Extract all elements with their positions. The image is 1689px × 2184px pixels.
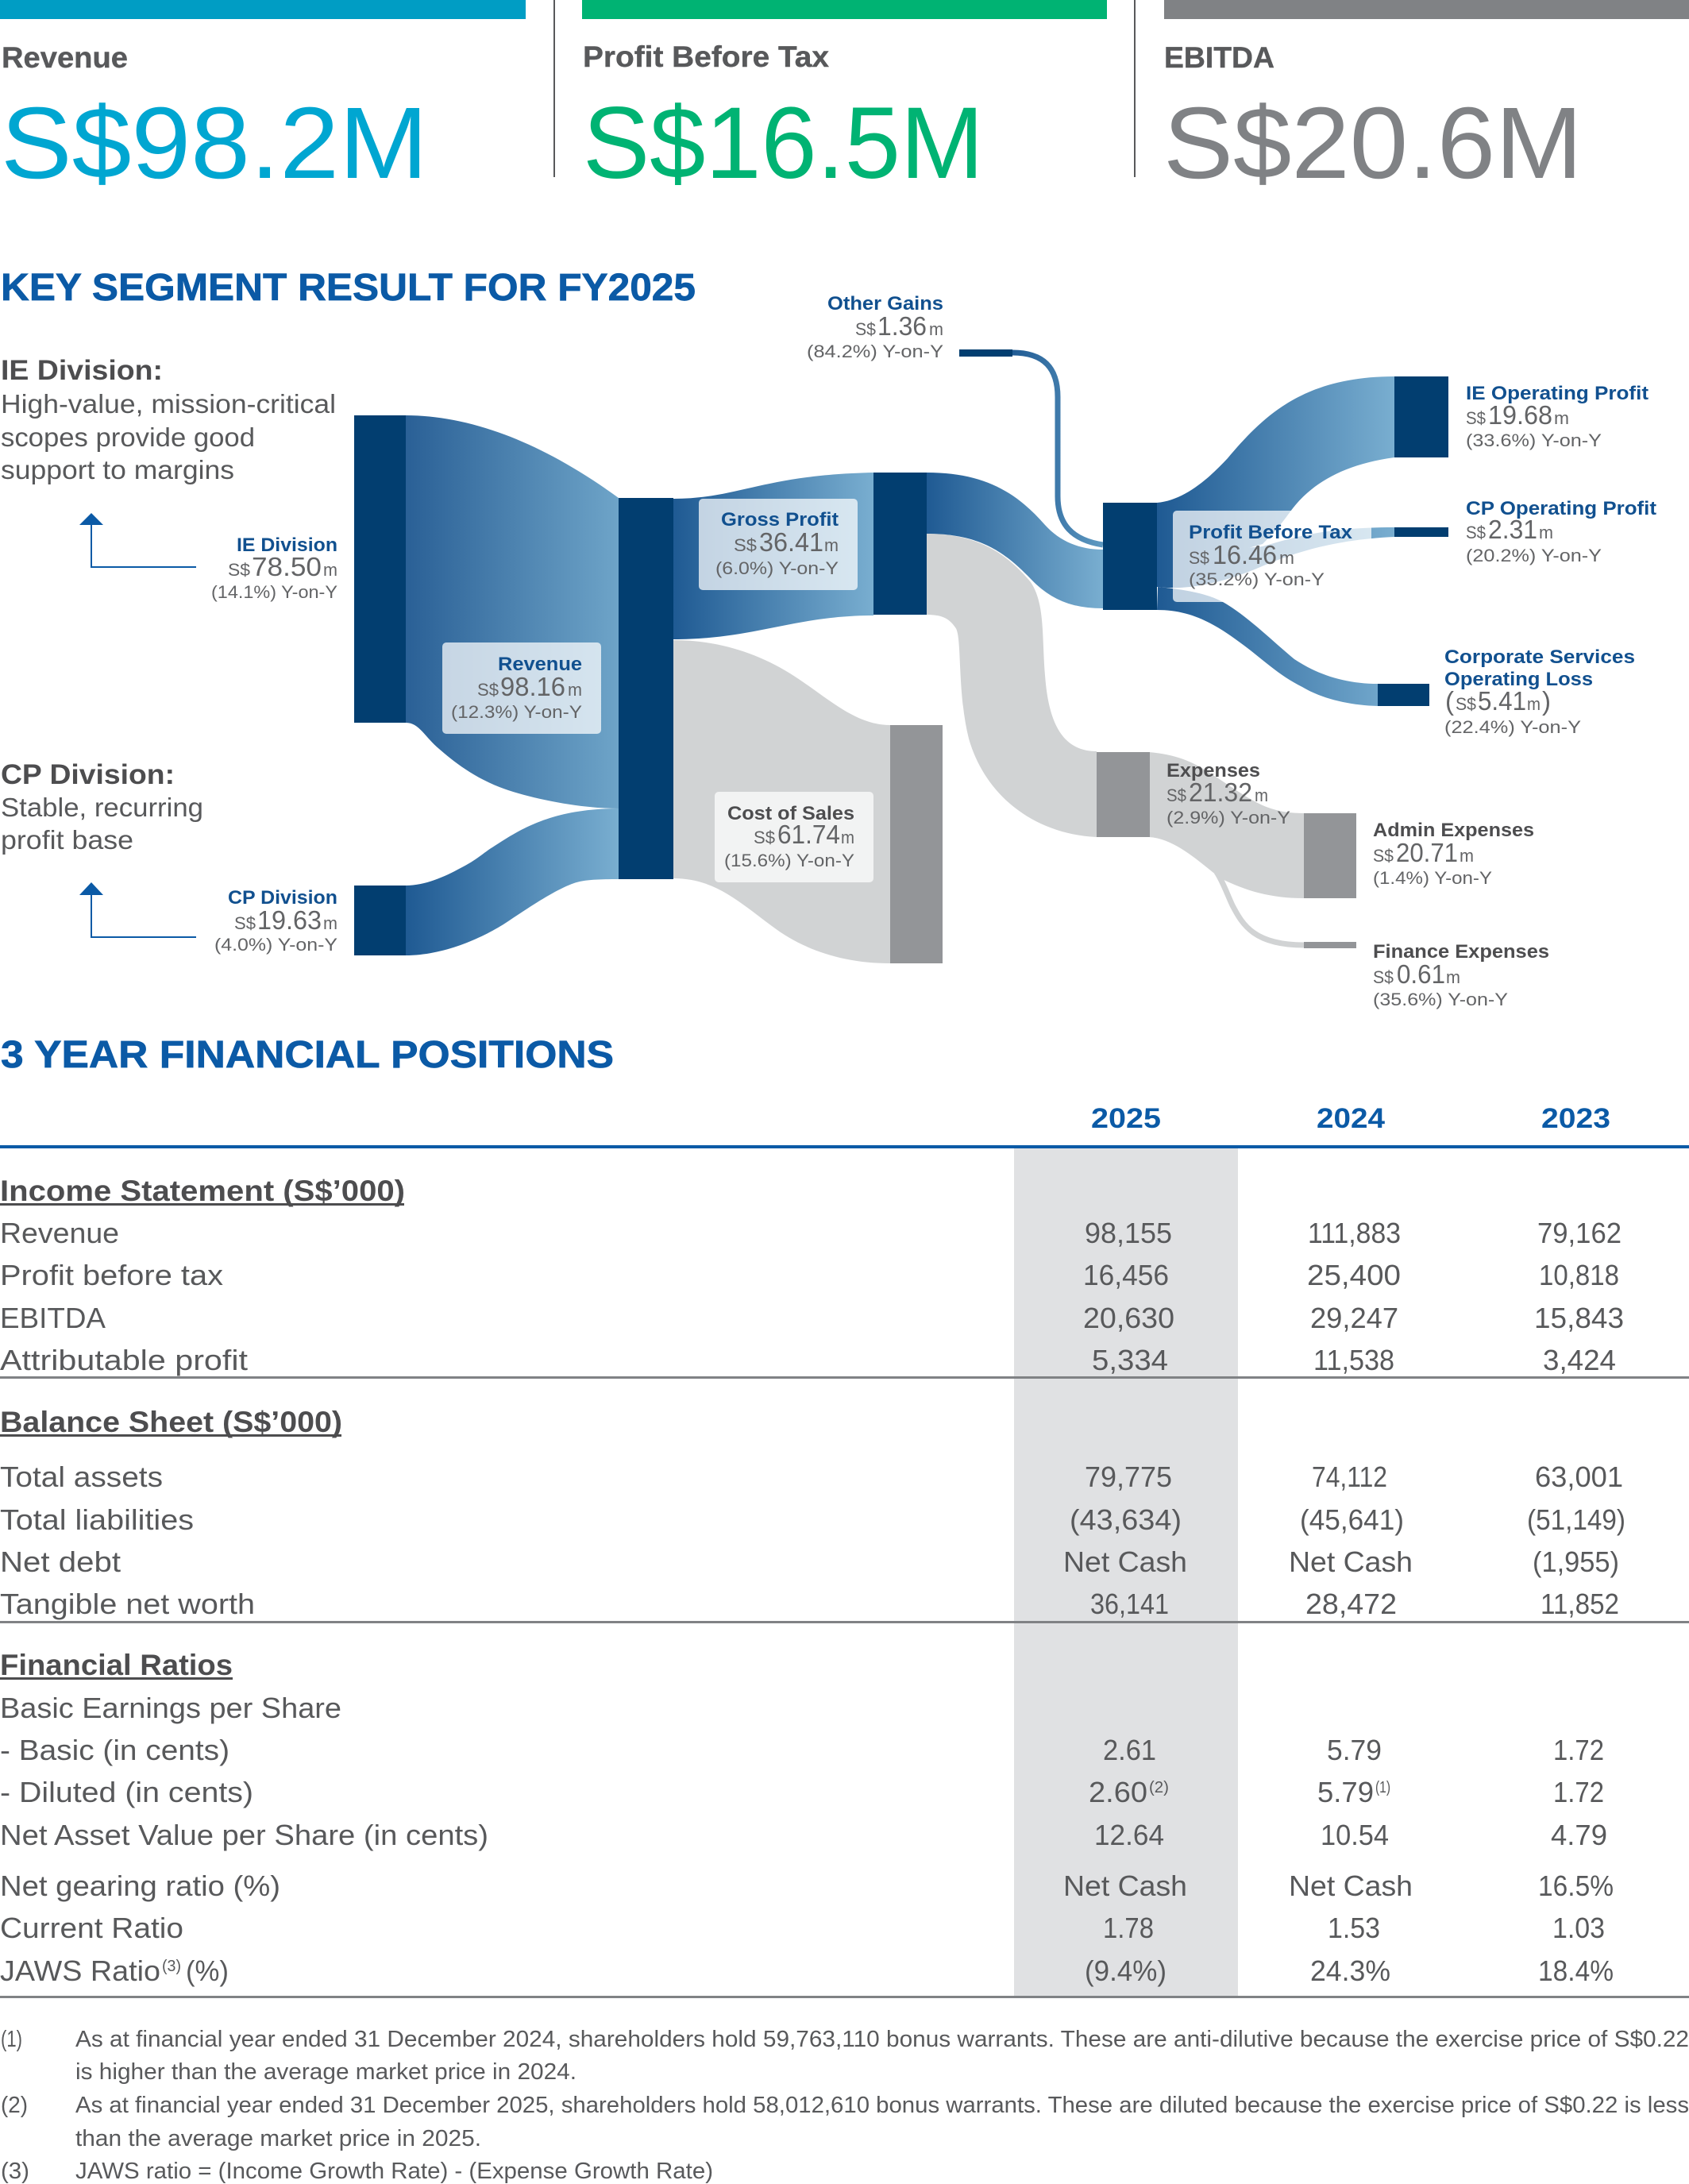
label: Profit Before Tax: 16.46	[1213, 540, 1277, 569]
flow: Revenue to Cost of Sales	[673, 640, 890, 963]
label: CP Operating Profit	[1466, 498, 1656, 565]
row: JAWS ratio: (3)	[162, 1958, 181, 1975]
text block: IE Division commentary: High-value, mission-critical	[1, 389, 336, 419]
label: CP Operating Profit: m	[1539, 523, 1553, 542]
text block: CP Division commentary: Stable, recurring	[1, 793, 203, 822]
row: total liabilities: (43,634)	[1070, 1503, 1182, 1536]
footnote 3: JAWS ratio = (Income Growth Rate) - (Expense Growth Rate)	[75, 2159, 713, 2184]
footnote 2: (2)	[1, 2093, 28, 2118]
row: attributable profit: 3,424	[1543, 1344, 1616, 1376]
row: net gearing ratio: Net Cash	[1289, 1870, 1413, 1902]
row: basic in cents: 2.61	[1103, 1734, 1156, 1766]
row: net debt: Net Cash	[1063, 1545, 1187, 1578]
row: basic in cents	[0, 1734, 1604, 1766]
footnote 1	[1, 2027, 1689, 2085]
label box: Revenue	[442, 642, 601, 734]
row: EBITDA: 15,843	[1534, 1302, 1624, 1334]
label: IE Operating Profit: m	[1554, 408, 1569, 428]
node: Corporate Services	[1378, 684, 1429, 706]
label: CP Division: 19.63	[257, 905, 322, 935]
table section: balance sheet	[0, 1406, 1625, 1620]
label: IE Operating Profit	[1466, 383, 1649, 450]
heading: financial ratios: Financial Ratios	[0, 1649, 233, 1681]
row: net debt: Net Cash	[1289, 1545, 1413, 1578]
row: tangible net worth	[0, 1588, 1619, 1620]
row: net gearing ratio: Net gearing ratio (%)	[0, 1870, 280, 1902]
label: CP Operating Profit: S$	[1466, 523, 1486, 542]
table section: income statement	[0, 1175, 1624, 1376]
node: IE Operating Profit	[1394, 376, 1448, 457]
row: revenue: Revenue	[0, 1217, 119, 1249]
label: Profit Before Tax: Profit Before Tax	[1189, 522, 1353, 543]
label: Revenue: (12.3%) Y-on-Y	[451, 702, 582, 722]
label: Gross Profit: Gross Profit	[721, 509, 839, 531]
node: Admin Expenses	[1304, 813, 1356, 898]
footnote 1: As at financial year ended 31 December 2024, shareholders hold 59,763,110 bonus warrants. These are anti-dilutive because the exercise price of S$0.22	[75, 2027, 1689, 2052]
label: Finance Expenses: 0.61	[1397, 959, 1445, 989]
label: IE Division: (14.1%) Y-on-Y	[211, 582, 337, 602]
label: CP Operating Profit: 2.31	[1488, 515, 1537, 544]
row: JAWS ratio: (%)	[186, 1954, 229, 1987]
label: Revenue: 98.16	[500, 672, 565, 701]
label: Corporate Services Operating Loss: (22.4%) Y-on-Y	[1444, 717, 1581, 737]
text block: CP Division commentary	[1, 759, 203, 855]
table header: years: 2023	[1541, 1103, 1610, 1134]
label: Admin Expenses: S$	[1373, 846, 1394, 866]
row: total assets: 63,001	[1535, 1461, 1623, 1493]
node: Expenses	[1097, 752, 1150, 837]
row: total assets: Total assets	[0, 1461, 163, 1493]
node: Other Gains	[959, 349, 1012, 357]
flow: Revenue to Gross Profit	[673, 473, 873, 639]
heading: income statement: Income Statement (S$’000)	[0, 1175, 405, 1207]
row: current ratio: 1.78	[1103, 1912, 1154, 1944]
row: current ratio: 1.03	[1552, 1912, 1605, 1944]
label: Finance Expenses	[1373, 941, 1549, 1009]
flow: Profit Before Tax to CP Operating Profit	[1157, 527, 1394, 588]
heading: balance sheet: Balance Sheet (S$’000)	[0, 1406, 342, 1438]
label: Admin Expenses: m	[1460, 846, 1474, 866]
label: Cost of Sales: 61.74	[777, 820, 840, 849]
row: net gearing ratio: 16.5%	[1538, 1870, 1614, 1902]
row: current ratio: Current Ratio	[0, 1912, 183, 1944]
row: net gearing ratio	[0, 1870, 1614, 1902]
footnote 3: (3)	[1, 2159, 29, 2184]
row: EBITDA: EBITDA	[0, 1302, 106, 1334]
row: attributable profit: 5,334	[1092, 1344, 1168, 1376]
flow: Profit Before Tax to IE Operating Profit	[1157, 376, 1394, 573]
row: attributable profit	[0, 1344, 1616, 1376]
flow: Gross Profit to Expenses	[927, 534, 1097, 837]
flow: Expenses to Admin Expenses	[1149, 752, 1304, 898]
row: total liabilities: Total liabilities	[0, 1503, 194, 1536]
heading: key segment result: KEY SEGMENT RESULT FOR FY2025	[1, 267, 696, 309]
row: attributable profit: 11,538	[1313, 1344, 1394, 1376]
row: basic earnings per share: Basic Earnings per Share	[0, 1692, 341, 1724]
label: Admin Expenses: Admin Expenses	[1373, 820, 1534, 841]
label: Finance Expenses: (35.6%) Y-on-Y	[1373, 990, 1508, 1009]
label: Cost of Sales: m	[841, 828, 854, 847]
label: Gross Profit: 36.41	[759, 527, 823, 557]
row: total liabilities	[0, 1503, 1625, 1536]
label: Revenue: S$	[477, 680, 499, 700]
label: IE Division: S$	[228, 560, 250, 580]
row: total assets: 74,112	[1312, 1461, 1387, 1493]
chart: sankey flows	[354, 349, 1448, 963]
row: basic in cents: - Basic (in cents)	[0, 1734, 229, 1766]
footnotes	[1, 2027, 1689, 2184]
label: Expenses: (2.9%) Y-on-Y	[1166, 808, 1290, 828]
panel: profit before tax KPI	[582, 0, 1107, 200]
label: Profit Before Tax: (35.2%) Y-on-Y	[1189, 569, 1325, 589]
flow: Profit Before Tax to Corporate Services	[1157, 587, 1378, 706]
row: profit before tax	[0, 1259, 1619, 1291]
label: Expenses: m	[1255, 785, 1268, 805]
row: profit before tax: 25,400	[1307, 1259, 1401, 1291]
node: Gross Profit	[873, 473, 927, 615]
row: current ratio	[0, 1912, 1605, 1944]
row: total liabilities: (45,641)	[1300, 1503, 1404, 1536]
label: Corporate Services Operating Loss: m	[1527, 694, 1541, 714]
table header: years: 2024	[1317, 1103, 1386, 1134]
panel: profit before tax KPI: S$16.5M	[583, 87, 984, 200]
row: net asset value per share	[0, 1819, 1607, 1851]
label: IE Division: m	[323, 560, 337, 580]
panel: EBITDA KPI: EBITDA	[1164, 41, 1274, 74]
flow: Expenses to Finance Expenses	[1217, 872, 1304, 945]
flow: CP Division to Revenue	[406, 808, 619, 955]
footnote 2: As at financial year ended 31 December 2025, shareholders hold 58,012,610 bonus warrants. These are diluted because the exercise price of S$0.22 is less	[75, 2093, 1689, 2118]
row: net gearing ratio: Net Cash	[1063, 1870, 1187, 1902]
label: Cost of Sales: Cost of Sales	[727, 803, 854, 824]
row: total assets: 79,775	[1085, 1461, 1172, 1493]
label: Finance Expenses: Finance Expenses	[1373, 941, 1549, 963]
text block: CP Division commentary: profit base	[1, 825, 133, 855]
text block: CP Division commentary: CP Division:	[1, 759, 175, 790]
flow: Other Gains to Profit Before Tax	[1012, 353, 1103, 545]
row: net asset value per share: 10.54	[1321, 1819, 1389, 1851]
node: IE Division	[354, 415, 406, 723]
label: Revenue: m	[568, 680, 582, 700]
row: revenue: 98,155	[1085, 1217, 1172, 1249]
label: Revenue: Revenue	[498, 654, 582, 675]
label: CP Operating Profit: (20.2%) Y-on-Y	[1466, 546, 1602, 565]
label: Finance Expenses: m	[1446, 967, 1460, 987]
node: Finance Expenses	[1304, 942, 1356, 948]
row: diluted in cents: (1)	[1375, 1779, 1390, 1796]
node: CP Division	[354, 886, 406, 955]
row: diluted in cents: 5.79	[1317, 1776, 1374, 1808]
label: Corporate Services Operating Loss: Operating Loss	[1444, 669, 1593, 690]
row: net debt	[0, 1545, 1619, 1578]
arrow: IE Division to commentary	[79, 513, 196, 567]
footnote 1: (1)	[1, 2027, 22, 2052]
row: basic in cents: 5.79	[1327, 1734, 1382, 1766]
label: IE Operating Profit: (33.6%) Y-on-Y	[1466, 430, 1602, 450]
label: IE Division: 78.50	[252, 552, 322, 581]
row: revenue: 79,162	[1537, 1217, 1622, 1249]
label: Cost of Sales	[724, 803, 854, 870]
text block: IE Division commentary	[1, 355, 336, 484]
row: JAWS ratio: 18.4%	[1538, 1954, 1614, 1987]
label: Corporate Services Operating Loss: S$	[1456, 694, 1476, 714]
row: diluted in cents: 2.60	[1089, 1776, 1147, 1808]
row: net asset value per share: Net Asset Value per Share (in cents)	[0, 1819, 488, 1851]
text block: IE Division commentary: support to margins	[1, 455, 234, 484]
label: Corporate Services Operating Loss: 5.41	[1478, 686, 1526, 716]
panel: EBITDA KPI: S$20.6M	[1163, 87, 1583, 200]
label box: Gross Profit	[699, 499, 858, 590]
label: Corporate Services Operating Loss	[1444, 646, 1635, 737]
label: Gross Profit	[715, 509, 839, 578]
label: Corporate Services Operating Loss: )	[1542, 686, 1551, 716]
panel: revenue KPI: S$98.2M	[1, 87, 428, 200]
panel: EBITDA KPI	[1163, 0, 1689, 200]
label: Profit Before Tax	[1189, 522, 1353, 589]
row: JAWS ratio: 24.3%	[1310, 1954, 1390, 1987]
panel: table highlight column 2025	[1014, 1148, 1238, 1996]
row: JAWS ratio: (9.4%)	[1085, 1954, 1166, 1987]
row: profit before tax: 16,456	[1083, 1259, 1169, 1291]
row: diluted in cents: 1.72	[1553, 1776, 1604, 1808]
label: Gross Profit: m	[824, 535, 839, 555]
label: Other Gains: m	[929, 319, 943, 339]
label: Expenses: Expenses	[1166, 760, 1260, 781]
row: total liabilities: (51,149)	[1527, 1503, 1625, 1536]
label: Profit Before Tax: m	[1279, 548, 1294, 568]
row: tangible net worth: 11,852	[1541, 1588, 1619, 1620]
row: diluted in cents: - Diluted (in cents)	[0, 1776, 253, 1808]
text block: IE Division commentary: scopes provide good	[1, 423, 255, 452]
row: tangible net worth: 36,141	[1090, 1588, 1169, 1620]
row: EBITDA: 29,247	[1310, 1302, 1398, 1334]
flow: IE Division to Revenue	[406, 415, 619, 808]
label: IE Operating Profit: 19.68	[1488, 400, 1552, 430]
label: Other Gains: 1.36	[877, 311, 927, 341]
row: EBITDA: 20,630	[1083, 1302, 1174, 1334]
label: Gross Profit: (6.0%) Y-on-Y	[715, 558, 839, 578]
label: CP Division: S$	[234, 913, 256, 933]
footnote 2: than the average market price in 2025.	[75, 2126, 481, 2151]
panel: revenue KPI: Revenue	[2, 41, 128, 74]
node: CP Operating Profit	[1394, 527, 1448, 537]
row: profit before tax: Profit before tax	[0, 1259, 223, 1291]
label: CP Division	[214, 887, 337, 955]
label: Other Gains: S$	[855, 319, 876, 339]
label: Corporate Services Operating Loss: (	[1445, 686, 1454, 716]
label: Other Gains: Other Gains	[827, 293, 943, 314]
label: Revenue	[451, 654, 582, 722]
label: Other Gains: (84.2%) Y-on-Y	[807, 341, 943, 361]
label: Profit Before Tax: S$	[1189, 548, 1209, 568]
label: Gross Profit: S$	[734, 535, 757, 555]
row: net debt: Net debt	[0, 1545, 121, 1578]
row: attributable profit: Attributable profit	[0, 1344, 248, 1376]
label: Admin Expenses: 20.71	[1396, 838, 1458, 867]
label: CP Operating Profit: CP Operating Profit	[1466, 498, 1656, 519]
footnote 2	[1, 2093, 1689, 2151]
text block: IE Division commentary: IE Division:	[1, 355, 163, 386]
row: profit before tax: 10,818	[1539, 1259, 1619, 1291]
label: IE Division	[211, 534, 337, 602]
row: JAWS ratio: JAWS Ratio	[0, 1954, 160, 1987]
row: revenue: 111,883	[1308, 1217, 1401, 1249]
row: tangible net worth: Tangible net worth	[0, 1588, 255, 1620]
table header: years: 2025	[1091, 1103, 1161, 1134]
node: Cost of Sales	[890, 725, 943, 963]
row: diluted in cents: (2)	[1149, 1779, 1169, 1796]
label: Expenses	[1166, 760, 1290, 828]
label box: Profit Before Tax	[1173, 511, 1371, 602]
heading: 3 year financial positions: 3 YEAR FINANCIAL POSITIONS	[1, 1034, 614, 1076]
label: Cost of Sales: (15.6%) Y-on-Y	[724, 851, 854, 870]
row: current ratio: 1.53	[1328, 1912, 1380, 1944]
panel: profit before tax KPI: Profit Before Tax	[583, 41, 829, 73]
row: diluted in cents	[0, 1776, 1604, 1808]
arrow: CP Division to commentary	[79, 882, 196, 937]
row: total assets	[0, 1461, 1623, 1493]
node: Profit Before Tax	[1103, 503, 1157, 610]
table header: years	[0, 1103, 1689, 1148]
row: JAWS ratio	[0, 1954, 1614, 1987]
label: Other Gains	[807, 293, 943, 361]
label: IE Operating Profit: S$	[1466, 408, 1486, 428]
label box: Cost of Sales	[715, 792, 873, 882]
label: Cost of Sales: S$	[754, 828, 775, 847]
row: EBITDA	[0, 1302, 1624, 1334]
label: CP Division: m	[323, 913, 337, 933]
label: Admin Expenses: (1.4%) Y-on-Y	[1373, 868, 1492, 888]
footnote 1: is higher than the average market price in 2024.	[75, 2059, 576, 2085]
label: CP Division: (4.0%) Y-on-Y	[214, 935, 337, 955]
table section: financial ratios	[0, 1649, 1614, 1987]
row: net asset value per share: 4.79	[1551, 1819, 1607, 1851]
label: Expenses: 21.32	[1189, 778, 1252, 807]
label: Finance Expenses: S$	[1373, 967, 1394, 987]
flow: Gross Profit to Profit Before Tax	[927, 473, 1103, 608]
panel: revenue KPI	[0, 0, 526, 200]
row: tangible net worth: 28,472	[1305, 1588, 1397, 1620]
row: net debt: (1,955)	[1533, 1545, 1619, 1578]
node: Revenue	[619, 498, 673, 879]
label: Admin Expenses	[1373, 820, 1534, 888]
row: basic in cents: 1.72	[1553, 1734, 1604, 1766]
label: Expenses: S$	[1166, 785, 1186, 805]
label: IE Division: IE Division	[237, 534, 337, 556]
label: IE Operating Profit: IE Operating Profit	[1466, 383, 1649, 404]
row: net asset value per share: 12.64	[1094, 1819, 1164, 1851]
row: revenue	[0, 1217, 1622, 1249]
label: CP Division: CP Division	[228, 887, 337, 909]
label: Corporate Services Operating Loss: Corporate Services	[1444, 646, 1635, 668]
